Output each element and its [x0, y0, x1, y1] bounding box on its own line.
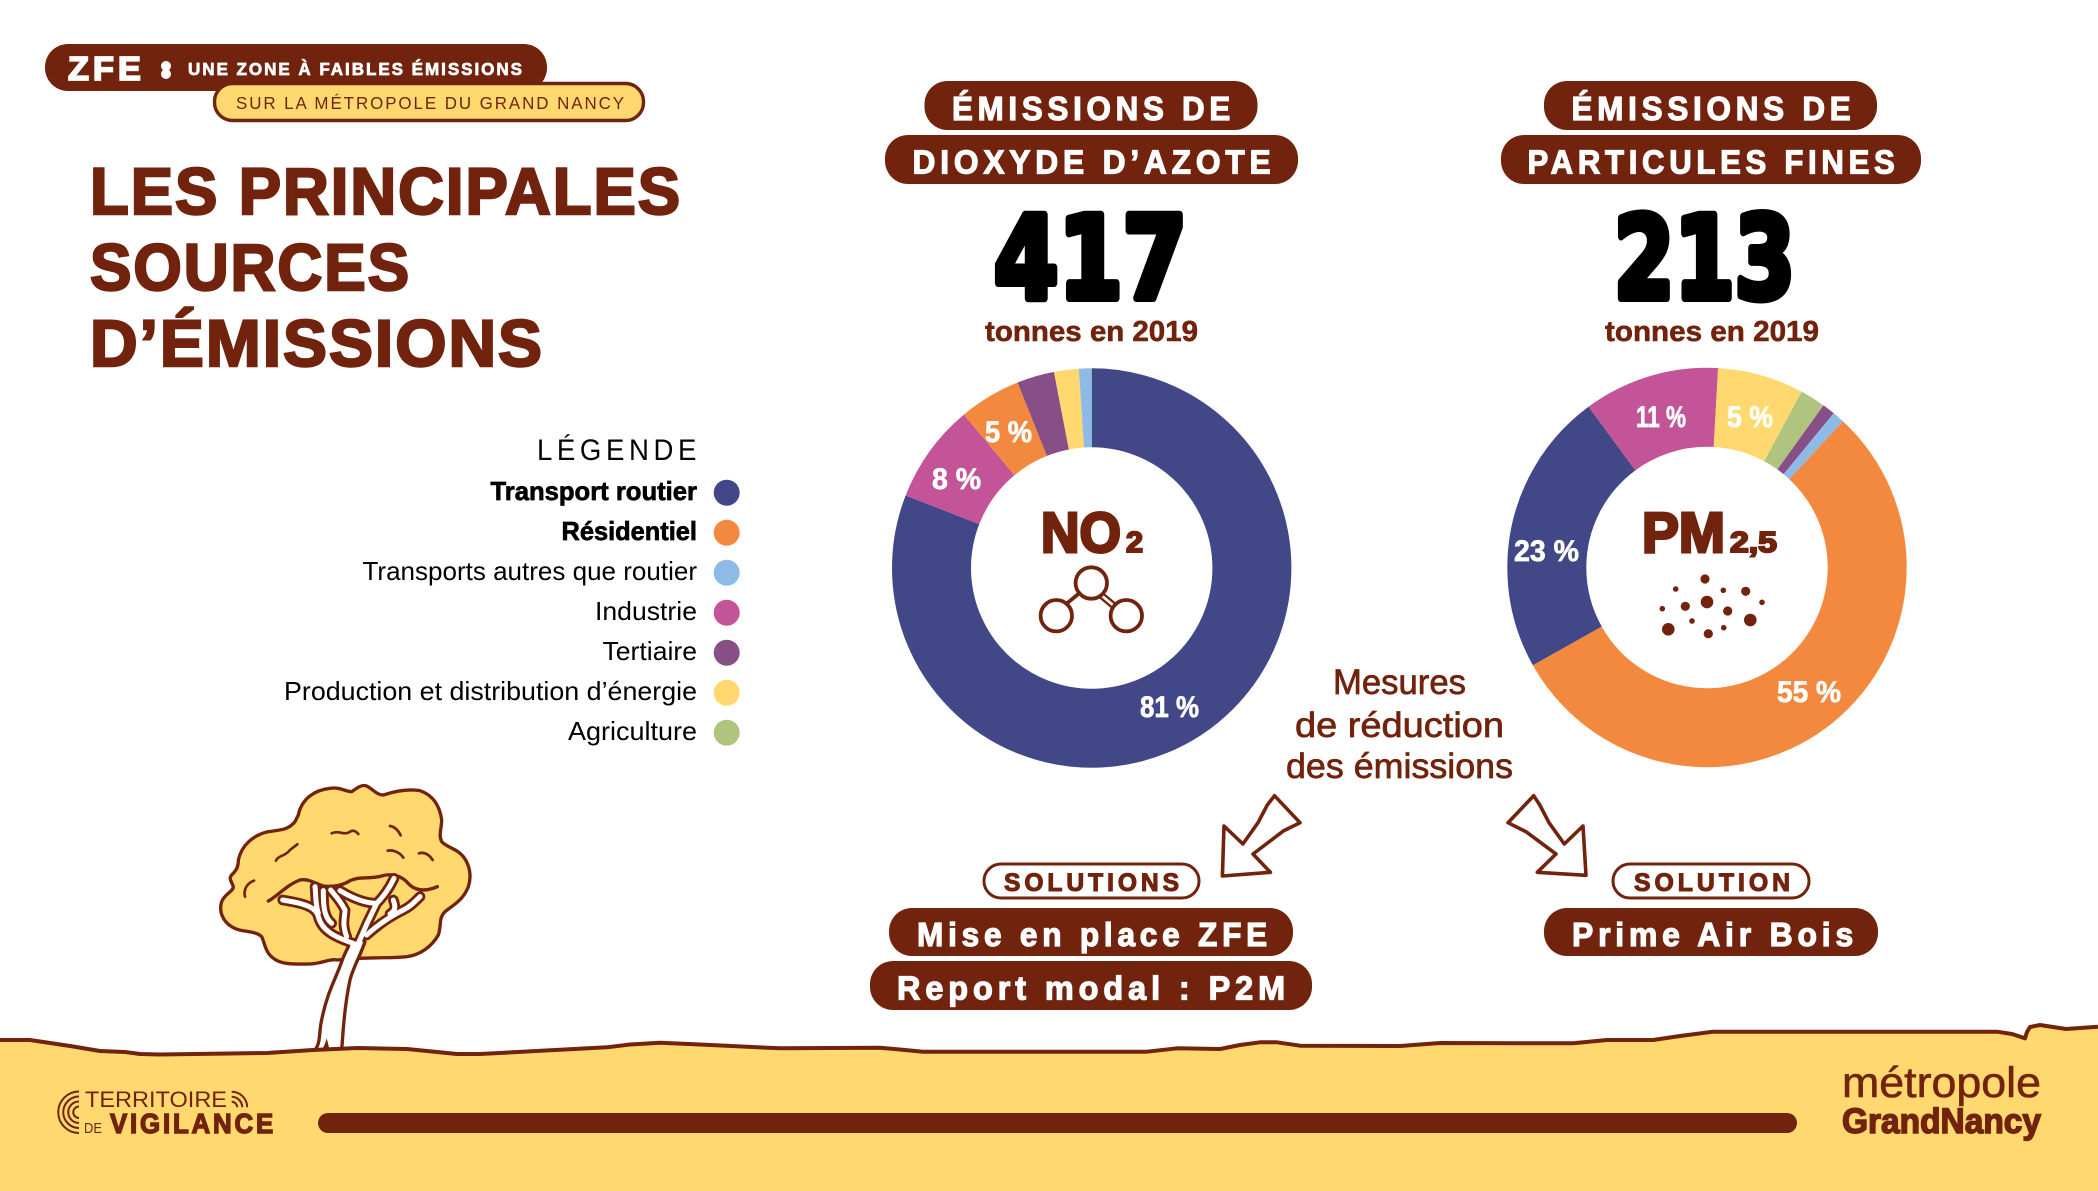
legend item: production énergie: Production et distribution d’énergie	[284, 676, 697, 706]
donut chart: PM2.5: 11 %	[1636, 401, 1686, 434]
arrow: left	[1222, 796, 1300, 876]
icon: fine particles	[1660, 574, 1765, 638]
tag: solution	[1613, 864, 1809, 898]
legend item: agriculture: Agriculture	[568, 716, 697, 746]
text: mesures de réduction: de réduction	[1295, 706, 1504, 745]
donut chart: NO2: 8 %	[932, 463, 981, 496]
donut chart: NO2: 5 %	[985, 416, 1032, 449]
donut chart: PM2.5: 23 %	[1514, 535, 1579, 568]
text: mesures de réduction: des émissions	[1286, 747, 1513, 786]
legend item: transport routier: Transport routier	[490, 476, 697, 506]
text: mesures de réduction	[1286, 663, 1513, 786]
NO2 label: 2	[1126, 527, 1143, 559]
solution: prime air bois: Prime Air Bois	[1572, 916, 1858, 953]
PM2,5 label: 2,5	[1730, 527, 1777, 559]
legend	[284, 434, 740, 746]
legend heading: LÉGENDE	[537, 434, 701, 467]
tag: solutions	[984, 864, 1199, 898]
heading: PM emissions: PARTICULES FINES	[1528, 144, 1900, 180]
logo: territoire de vigilance: DE	[84, 1121, 102, 1137]
tag: solution: SOLUTION	[1634, 869, 1794, 897]
heading: NO2 emissions	[885, 81, 1298, 184]
top banner: ZFE: UNE ZONE À FAIBLES ÉMISSIONS	[188, 58, 524, 79]
text: mesures de réduction: Mesures	[1333, 663, 1466, 702]
solution: prime air bois	[1544, 908, 1878, 956]
logo: métropole Grand Nancy: GrandNancy	[1842, 1102, 2042, 1141]
solution: mise en place ZFE: Mise en place ZFE	[917, 916, 1272, 953]
donut chart: PM2.5: 55 %	[1777, 676, 1841, 709]
donut chart: NO2: 81 %	[1140, 691, 1199, 724]
donut chart: NO2	[931, 408, 1252, 728]
legend item: industrie	[595, 596, 740, 626]
heading: NO2 emissions: ÉMISSIONS DE	[952, 90, 1235, 127]
legend item: résidentiel: Résidentiel	[562, 516, 697, 546]
donut chart: PM2.5: 5 %	[1727, 401, 1773, 434]
tag: solutions: SOLUTIONS	[1004, 869, 1183, 897]
arrow: right	[1508, 796, 1586, 875]
logo: territoire de vigilance: VIGILANCE	[110, 1108, 276, 1139]
legend item: industrie: Industrie	[595, 596, 697, 626]
title: SOURCES	[90, 230, 411, 304]
number: 417 tonnes: 417	[994, 192, 1187, 325]
heading: PM emissions	[1501, 81, 1921, 184]
title	[90, 154, 682, 380]
PM2,5 label: PM	[1642, 501, 1725, 565]
top banner: ZFE: ZFE	[68, 50, 145, 87]
solution: report modal P2M: Report modal : P2M	[897, 970, 1290, 1006]
number: 213 tonnes: 213	[1614, 192, 1795, 325]
top banner: ZFE	[45, 44, 644, 120]
title: LES PRINCIPALES	[90, 154, 682, 228]
heading: NO2 emissions: DIOXYDE D’AZOTE	[912, 144, 1276, 180]
logo: métropole Grand Nancy: métropole	[1842, 1059, 2041, 1107]
PM2,5 label	[1642, 501, 1777, 565]
number: 417 tonnes: tonnes en 2019	[985, 316, 1198, 348]
logo: métropole Grand Nancy	[1842, 1059, 2042, 1141]
title: D’ÉMISSIONS	[90, 306, 544, 380]
legend item: tertiaire: Tertiaire	[602, 636, 697, 666]
donut chart: PM2.5	[1514, 401, 1867, 728]
heading: PM emissions: ÉMISSIONS DE	[1572, 90, 1856, 127]
logo: territoire de vigilance: TERRITOIRE	[85, 1087, 227, 1112]
legend item: transports autres: Transports autres que routier	[362, 556, 697, 586]
ground band	[0, 1025, 2098, 1191]
icon: tree	[221, 785, 470, 1052]
progress bar	[318, 1113, 1797, 1133]
top banner: ZFE: SUR LA MÉTROPOLE DU GRAND NANCY	[236, 93, 626, 113]
NO2 label: NO	[1041, 501, 1121, 565]
icon: NO2 molecule	[1041, 567, 1142, 631]
logo: territoire de vigilance	[58, 1087, 276, 1139]
solution: report modal P2M	[870, 961, 1312, 1010]
legend item: tertiaire	[602, 636, 740, 666]
number: 213 tonnes: tonnes en 2019	[1605, 316, 1819, 348]
